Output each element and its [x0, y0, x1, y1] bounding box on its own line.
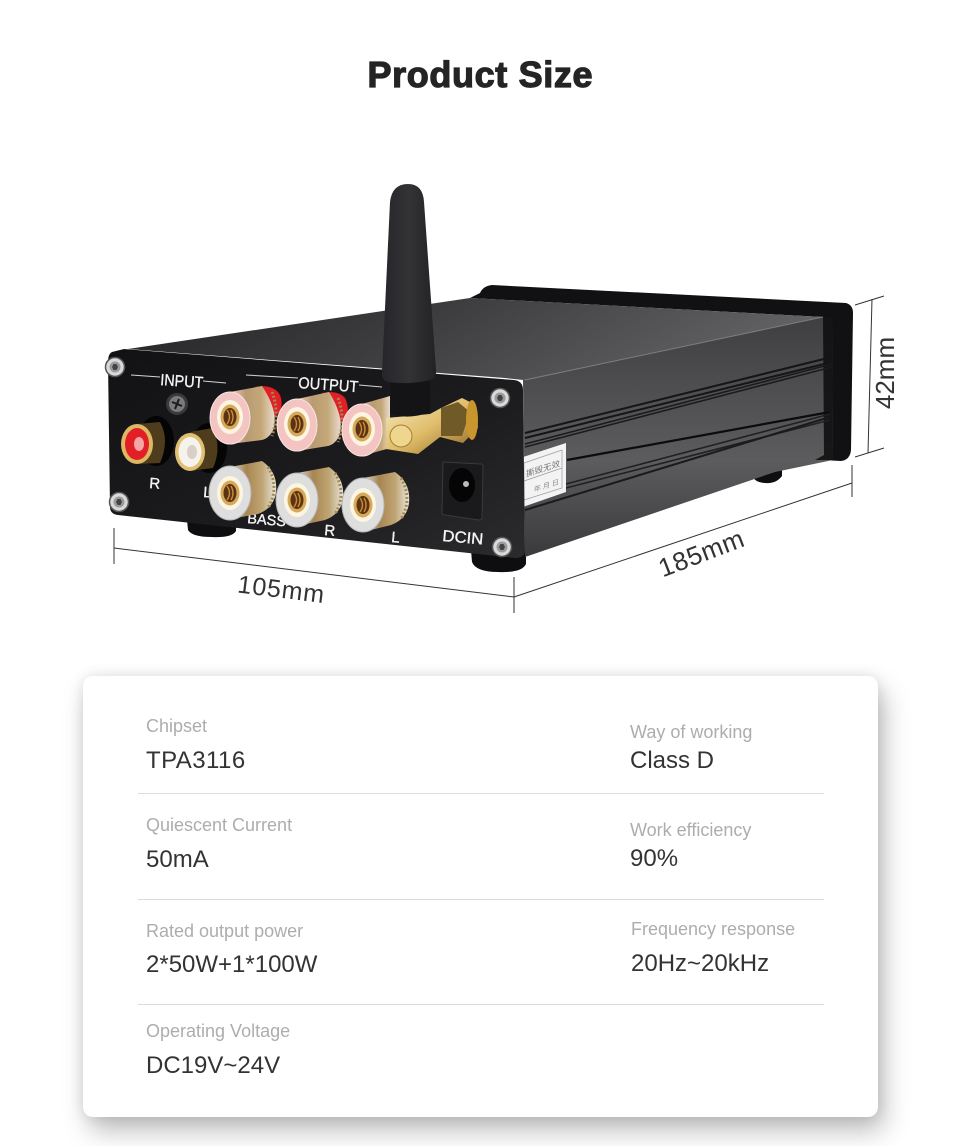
spec: frequency response: [631, 919, 795, 977]
rubber feet: [187, 470, 782, 572]
dimension: 185mm: [514, 465, 852, 613]
RCA jack L: [175, 423, 227, 473]
spec: work efficiency: 90%: [630, 845, 678, 872]
spec: work efficiency: Work efficiency: [630, 820, 751, 840]
spec: way of working: Class D: [630, 747, 714, 774]
panel labels: R: [324, 522, 336, 540]
side face with grooves: [523, 317, 833, 557]
panel labels: DCIN: [442, 528, 484, 549]
spec: way of working: Way of working: [630, 722, 752, 742]
warranty seal sticker: [520, 443, 566, 508]
spec: work efficiency: [630, 820, 752, 872]
top face: [128, 298, 823, 380]
spec: quiescent current: [146, 815, 292, 873]
panel labels: R: [149, 475, 161, 493]
panel labels: L: [391, 529, 400, 547]
spec: frequency response: 20Hz~20kHz: [631, 950, 769, 977]
spec: way of working: [630, 722, 752, 774]
dimension: 42mm: [855, 296, 900, 457]
spec: frequency response: Frequency response: [631, 919, 795, 939]
center screw: [166, 393, 188, 415]
panel: specifications card: [83, 676, 878, 1117]
spec: operating voltage: [146, 1021, 290, 1079]
title: Product Size: [368, 54, 592, 95]
dimension: 105mm: 105mm: [236, 571, 326, 609]
antenna: [382, 184, 436, 417]
spec: chipset: Chipset: [146, 716, 207, 736]
spec: operating voltage: Operating Voltage: [146, 1021, 290, 1041]
bass and speaker binding posts: [209, 461, 409, 532]
spec: rated output power: Rated output power: [146, 921, 303, 941]
front panel: [108, 349, 525, 558]
spec: rated output power: [146, 921, 318, 978]
panel labels: [149, 372, 484, 549]
rear panel: [470, 285, 853, 461]
spec: rated output power: 2*50W+1*100W: [146, 951, 317, 978]
panel labels: L: [203, 484, 212, 502]
RCA jack R: [121, 416, 174, 466]
panel labels: BASS: [247, 511, 287, 530]
warranty seal sticker: 年 月 日: [534, 477, 559, 494]
spec: chipset: [146, 716, 246, 774]
spec: quiescent current: 50mA: [146, 846, 209, 873]
warranty seal sticker: 撕毁无效: [526, 457, 560, 479]
dimension: 105mm: [114, 528, 514, 609]
panel graphic lines: [131, 375, 382, 387]
panel labels: INPUT: [160, 372, 204, 392]
antenna connector: [386, 398, 478, 454]
spec: quiescent current: Quiescent Current: [146, 815, 292, 835]
panel labels: OUTPUT: [298, 375, 359, 396]
spec: operating voltage: DC19V~24V: [146, 1052, 280, 1079]
spec: chipset: TPA3116: [146, 747, 246, 774]
amplifier device photo: [106, 184, 853, 572]
DC power jack: [442, 462, 483, 520]
dimension: 185mm: 185mm: [654, 523, 748, 583]
dimension: 42mm: 42mm: [870, 337, 900, 409]
output binding posts: [210, 386, 390, 456]
product illustration with dimensions: [104, 54, 900, 613]
corner screws: [106, 358, 512, 556]
